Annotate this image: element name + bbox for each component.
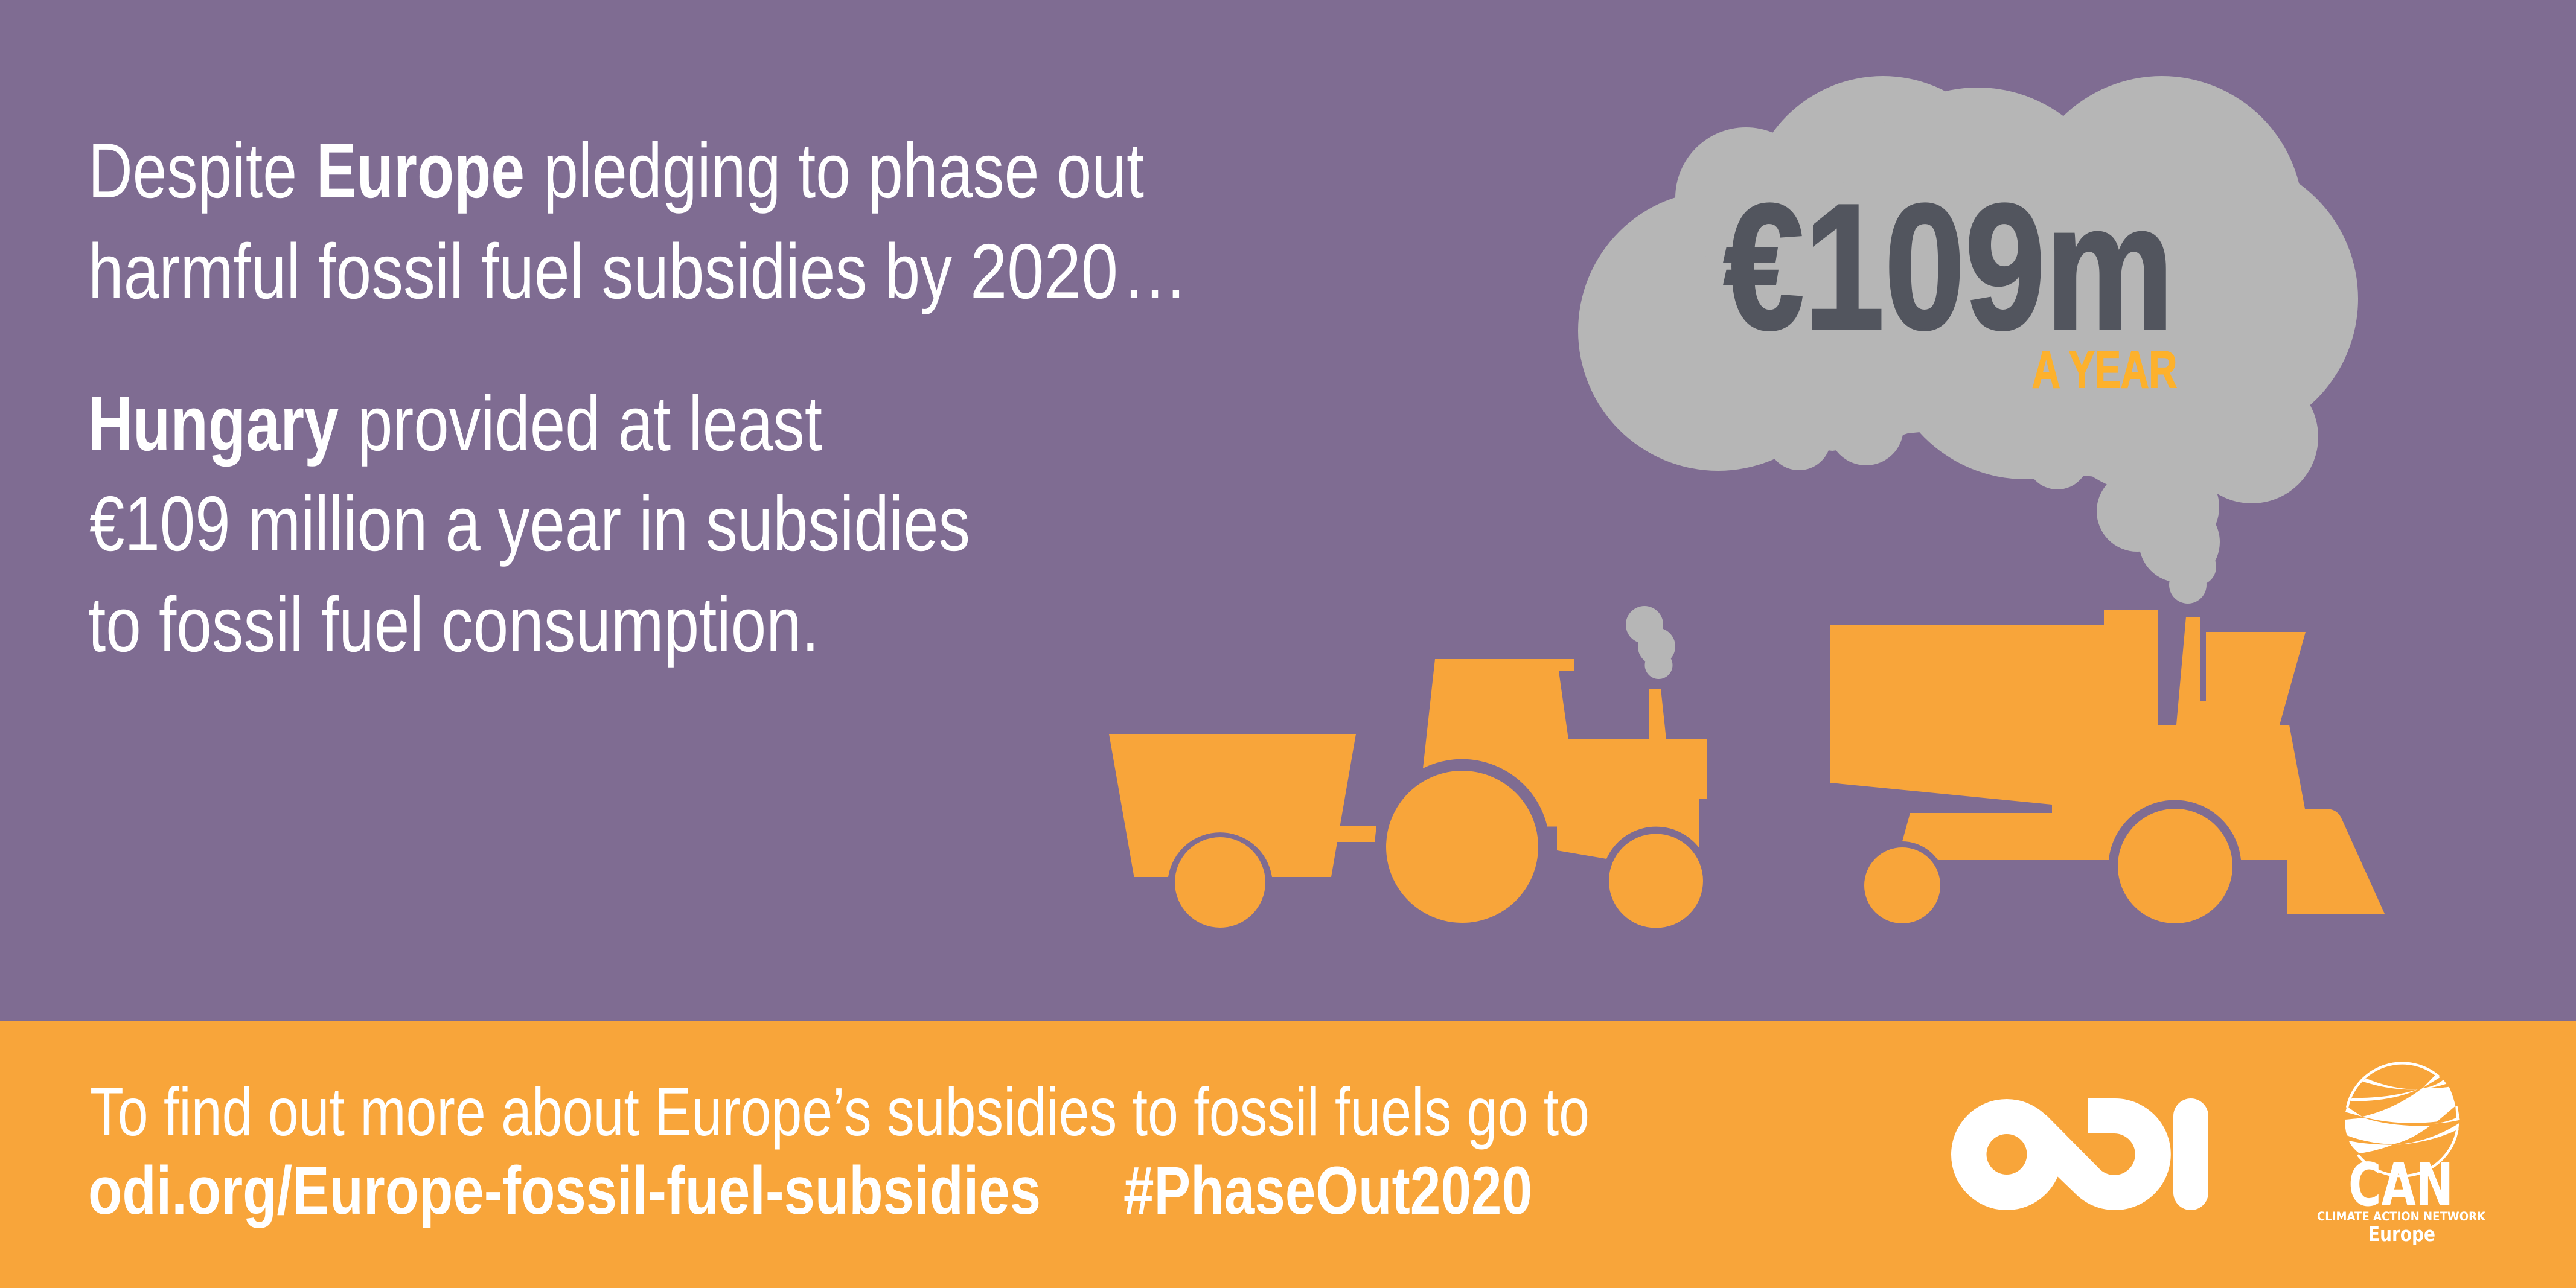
text: Climate Action Network: CLIMATE ACTION NETWORK <box>2317 1210 2486 1223</box>
panel: purple background <box>0 0 2576 1021</box>
text block: Hungary subsidy statement <box>88 380 970 668</box>
text block: Europe pledge: harmful fossil fuel subsidies by <box>88 228 952 315</box>
panel: orange footer bar <box>0 1021 2576 1288</box>
text: footer call to action: To find out more about Europe’s subsidies to fossil fuels go to <box>90 1074 1590 1150</box>
icon: combine harvester <box>1830 610 2385 923</box>
logo: CAN Europe <box>2317 1063 2486 1246</box>
text block: Hungary subsidy statement: Hungary <box>88 380 339 467</box>
text block: Europe pledge: pledging to phase out <box>543 127 1144 214</box>
text block: Hungary subsidy statement: provided at least <box>357 380 822 467</box>
text block: Europe pledge: Despite <box>88 127 297 214</box>
icon: large smoke cloud <box>1578 76 2358 604</box>
text block: Hungary subsidy statement: to fossil fuel consumption. <box>88 581 819 668</box>
text block: Hungary subsidy statement: €109 million a year in subsidies <box>89 480 970 567</box>
text: footer link: odi.org/Europe-fossil-fuel-subsidies <box>88 1153 1041 1228</box>
icon: tractor with trailer <box>1109 659 1707 928</box>
icon: small tractor smoke <box>1626 606 1675 679</box>
text block: Europe pledge: Europe <box>316 127 525 214</box>
text block: Europe pledge: 2020 <box>970 228 1118 315</box>
text: hashtag: #PhaseOut2020 <box>1123 1153 1532 1228</box>
text block: Europe pledge <box>88 127 1188 315</box>
label: a year: A YEAR <box>2032 341 2177 399</box>
logo: ODI <box>1951 1098 2208 1210</box>
text block: Europe pledge: … <box>1122 228 1188 315</box>
text: CAN: CAN <box>2348 1151 2453 1220</box>
big figure: 109 million euro: €109m <box>1724 167 2174 366</box>
icon: globe <box>2345 1063 2460 1176</box>
text: Europe: Europe <box>2368 1222 2435 1246</box>
